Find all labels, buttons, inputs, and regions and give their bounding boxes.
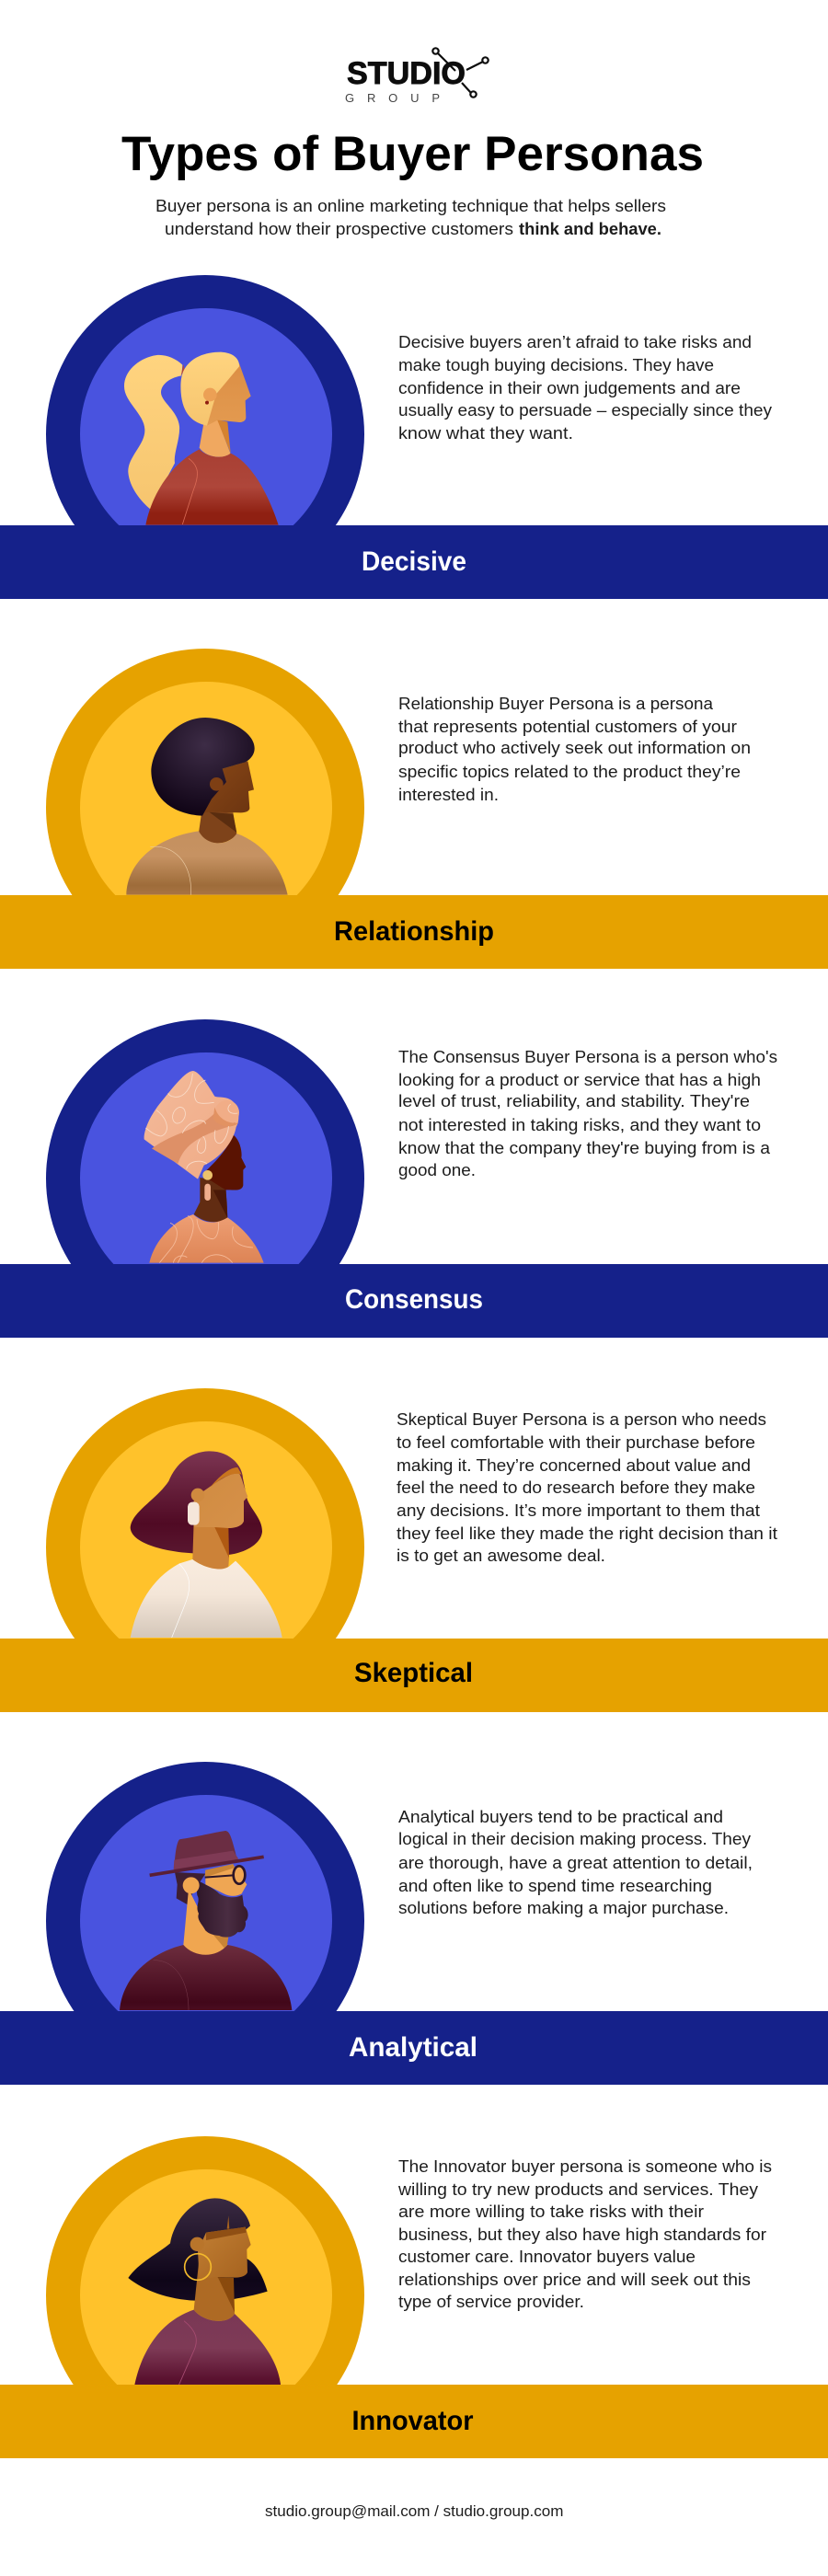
description: Decisive: make tough buying decisions. They have (398, 356, 714, 374)
description: Decisive (398, 333, 772, 443)
banner: Skeptical (0, 1639, 828, 1712)
portrait: man with afro (126, 718, 288, 895)
panel: Skeptical (0, 1388, 828, 1712)
medallion: Decisive (46, 275, 364, 593)
description: Relationship: that represents potential customers of your (398, 718, 737, 736)
description: Analytical: solutions before making a major purchase. (398, 1899, 729, 1917)
medallion: Analytical (46, 1762, 364, 2080)
medallion: Innovator (46, 2136, 364, 2455)
description: Relationship (398, 695, 751, 804)
description: Decisive: confidence in their own judgements and are (398, 379, 741, 397)
panel: Innovator (0, 2136, 828, 2458)
description: Consensus: not interested in taking risks, and they want to (398, 1116, 761, 1134)
banner: Analytical: Analytical (349, 2032, 477, 2063)
description: Skeptical: to feel comfortable with their purchase before (397, 1433, 755, 1452)
panel: Decisive (0, 275, 828, 599)
description: Relationship: product who actively seek out information on (398, 739, 751, 757)
description: Consensus (398, 1048, 777, 1179)
intro text (155, 197, 666, 238)
description: Skeptical: feel the need to do research before they make (397, 1478, 755, 1497)
description: Analytical: and often like to spend time researching (398, 1877, 712, 1895)
description: Skeptical: any decisions. It’s more important to them that (397, 1501, 760, 1520)
description: Analytical: are thorough, have a great attention to detail, (398, 1854, 753, 1872)
banner: Relationship: Relationship (334, 916, 494, 947)
panel: Consensus (0, 1019, 828, 1338)
description: Skeptical (397, 1410, 777, 1565)
logo: Studio Group: GROUP (345, 91, 440, 105)
portrait: bearded man with hat and glasses (120, 1831, 292, 2010)
banner: Consensus (0, 1264, 828, 1338)
description: Decisive: Decisive buyers aren’t afraid to take risks and (398, 333, 752, 351)
description: Skeptical: is to get an awesome deal. (397, 1547, 605, 1565)
description: Skeptical: making it. They’re concerned about value and (397, 1456, 751, 1475)
description: Skeptical: they feel like they made the right decision than it (397, 1524, 777, 1543)
footer contact: studio.group@mail.com / studio.group.com (265, 2502, 563, 2520)
description: Innovator: willing to try new products and services. They (397, 2180, 758, 2199)
description: Consensus: looking for a product or service that has a high (398, 1071, 761, 1089)
banner: Consensus: Consensus (345, 1284, 483, 1315)
description: Analytical (398, 1808, 753, 1917)
description: Consensus: know that the company they're buying from is a (398, 1139, 771, 1157)
description: Innovator: The Innovator buyer persona is someone who is (398, 2157, 772, 2176)
banner: Skeptical: Skeptical (354, 1658, 473, 1688)
portrait: woman with dark bob, bangs and hoop earring (128, 2198, 281, 2386)
title: Types of Buyer Personas (121, 127, 704, 181)
logo: Studio Group: STUDIO (347, 56, 466, 91)
description: Innovator: are more willing to take risks with their (398, 2202, 704, 2221)
description: Innovator: type of service provider. (398, 2293, 584, 2311)
description: Skeptical: Skeptical Buyer Persona is a person who needs (397, 1410, 766, 1429)
description: Consensus: The Consensus Buyer Persona is a person who's (398, 1048, 777, 1066)
description: Consensus: good one. (398, 1161, 476, 1179)
description: Decisive: usually easy to persuade – especially since they (398, 401, 772, 420)
description: Analytical: logical in their decision making process. They (398, 1830, 751, 1848)
intro text: think and behave. (519, 220, 661, 238)
medallion: Relationship (46, 649, 364, 967)
description: Relationship: interested in. (398, 786, 499, 804)
intro text: Buyer persona is an online marketing technique that helps sellers (155, 197, 666, 215)
medallion: Skeptical (46, 1388, 364, 1707)
intro text: understand how their prospective customers (165, 220, 513, 238)
description: Innovator: relationships over price and will seek out this (398, 2271, 751, 2289)
banner: Innovator (0, 2385, 828, 2458)
description: Innovator (397, 2157, 772, 2311)
banner: Relationship (0, 895, 828, 969)
description: Relationship: Relationship Buyer Persona is a persona (398, 695, 714, 713)
logo: Studio Group (345, 48, 489, 105)
banner: Decisive: Decisive (362, 546, 466, 577)
panel: Relationship (0, 649, 828, 969)
medallion: Consensus (46, 1019, 364, 1338)
portrait: woman with patterned turban (144, 1071, 264, 1263)
description: Innovator: business, but they also have high standards for (398, 2225, 766, 2244)
banner: Decisive (0, 525, 828, 599)
description: Analytical: Analytical buyers tend to be practical and (398, 1808, 723, 1826)
portrait: blonde woman with ponytail (124, 352, 279, 525)
panel: Analytical (0, 1762, 828, 2085)
description: Consensus: level of trust, reliability, and stability. They're (398, 1092, 750, 1110)
description: Innovator: customer care. Innovator buyers value (398, 2248, 696, 2266)
banner: Analytical (0, 2011, 828, 2085)
description: Relationship: specific topics related to the product they’re (398, 763, 741, 781)
banner: Innovator: Innovator (351, 2406, 474, 2436)
description: Decisive: know what they want. (398, 424, 573, 443)
portrait: woman with burgundy bob (131, 1451, 282, 1638)
